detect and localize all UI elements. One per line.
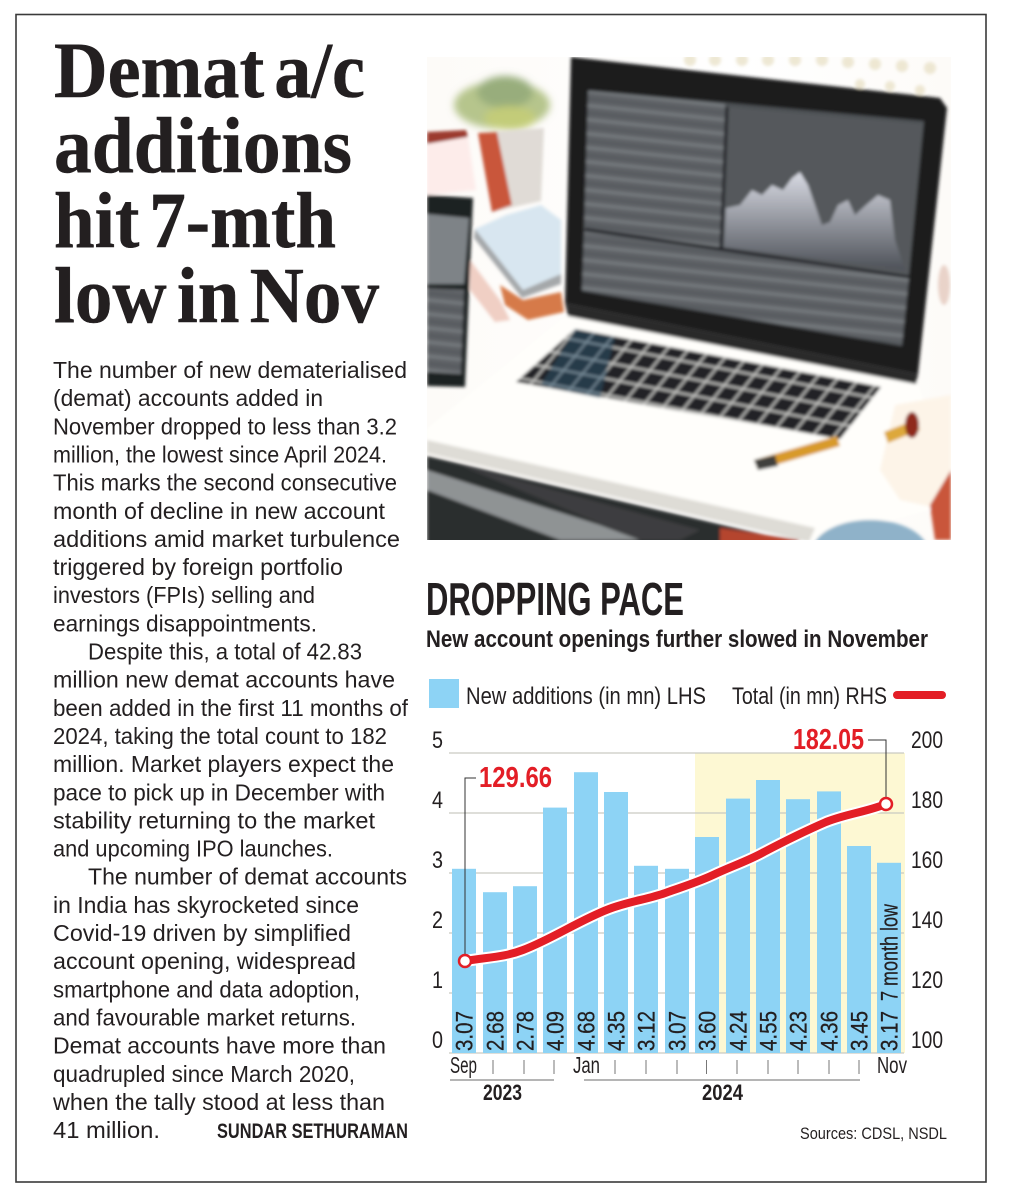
leader line: start: [465, 778, 476, 955]
article body text: 2024, taking the total count to 182: [53, 723, 387, 749]
bar value labels: 3.17: [876, 1011, 904, 1051]
right axis labels: 100: [911, 1027, 943, 1054]
left axis labels: [432, 727, 443, 1054]
right axis labels: 140: [911, 907, 943, 934]
article body text: Demat accounts have more than: [53, 1033, 386, 1059]
article body text: 41 million.: [53, 1117, 160, 1143]
bar value labels: 4.35: [604, 1011, 630, 1051]
article body text: investors (FPIs) selling and: [53, 582, 315, 608]
icon: dotted wall: [684, 54, 936, 95]
article body text: million new demat accounts have: [53, 667, 395, 693]
bars: [452, 772, 901, 1053]
icon: bottom table panel: [582, 232, 909, 345]
right axis labels: 180: [911, 787, 943, 814]
icon: desk bottom: [427, 454, 798, 540]
chart title: DROPPING PACE: [426, 573, 684, 625]
icon: laptop base: [515, 312, 934, 540]
article body text: month of decline in new account: [53, 498, 386, 524]
article body text: This marks the second consecutive: [53, 470, 397, 496]
bar value labels: 4.24: [726, 1011, 752, 1051]
month labels: Nov: [877, 1052, 907, 1078]
icon: left table panel: [584, 91, 725, 247]
icon: background pink object: [938, 265, 950, 305]
end marker: [880, 798, 892, 810]
left axis labels: 4: [432, 787, 443, 814]
article body text: and upcoming IPO launches.: [53, 836, 333, 862]
month labels: Jan: [573, 1052, 600, 1078]
month ticks: [493, 1060, 859, 1074]
left axis labels: 5: [432, 727, 443, 754]
bar value labels: 3.07: [664, 1011, 692, 1051]
icon: spiral pink desk: [470, 260, 510, 322]
gridlines: [449, 753, 904, 1053]
value label: 129.66: 129.66: [479, 762, 552, 794]
total line: [465, 804, 886, 961]
month labels: Sep: [450, 1052, 477, 1078]
headline: [54, 28, 379, 340]
article body text: earnings disappointments.: [53, 610, 317, 636]
year label: 2023: 2023: [483, 1080, 522, 1105]
bar value labels: 4.55: [756, 1011, 782, 1051]
icon: smartphone: [427, 195, 473, 387]
icon: blue sleeve: [814, 518, 926, 540]
right axis labels: 200: [911, 727, 943, 754]
article body text: The number of demat accounts: [88, 864, 407, 890]
headline: Demat a/c: [54, 28, 365, 115]
chart subtitle: New account openings further slowed in November: [426, 626, 928, 653]
bar value labels: 3.07: [452, 1011, 478, 1051]
right axis labels: 120: [911, 967, 943, 994]
year bracket lines: [450, 1079, 860, 1081]
legend: total label: Total (in mn) RHS: [732, 683, 887, 710]
left axis labels: 1: [432, 967, 443, 994]
left axis labels: 0: [432, 1027, 443, 1054]
icon: laptop screen: [582, 90, 924, 346]
icon: plant pot: [494, 127, 545, 210]
article body text: stability returning to the market: [53, 807, 376, 833]
leader line: end: [868, 740, 886, 798]
bar value labels: 3.12: [634, 1011, 660, 1051]
headline: additions: [54, 103, 352, 190]
source note: Sources: CDSL, NSDL: [800, 1125, 947, 1143]
bar value labels: 2.78: [512, 1011, 540, 1051]
article body text: triggered by foreign portfolio: [53, 554, 343, 580]
icon: stacked notebook: [475, 205, 561, 290]
bar value labels: 4.68: [574, 1011, 600, 1051]
bar value labels: 3.45: [846, 1011, 874, 1051]
bar value labels: 4.36: [816, 1011, 844, 1051]
bar value labels: 4.23: [786, 1011, 812, 1051]
icon: red book corner: [427, 130, 468, 144]
chart: new additions bars and total line: [432, 724, 943, 1105]
article body text: smartphone and data adoption,: [53, 976, 360, 1002]
value label: 182.05: 182.05: [793, 724, 864, 756]
article body text: account opening, widespread: [53, 948, 356, 974]
byline: SUNDAR SETHURAMAN: [217, 1120, 408, 1143]
article body text: and favourable market returns.: [53, 1004, 356, 1030]
month labels: [450, 1052, 907, 1078]
article body text: additions amid market turbulence: [53, 526, 400, 552]
icon: pink desk area: [427, 137, 476, 195]
article body text: been added in the first 11 months of: [53, 695, 409, 721]
icon: screen dividers: [585, 107, 909, 277]
article body text: Despite this, a total of 42.83: [88, 638, 362, 664]
bar value labels: [452, 1011, 904, 1051]
right axis labels: [911, 727, 943, 1054]
bar value labels: 3.60: [694, 1011, 722, 1051]
total line halo: [465, 804, 886, 961]
icon: keyboard: [516, 329, 881, 439]
icon: hinge: [565, 303, 918, 384]
headline: hit 7-mth: [54, 178, 336, 265]
legend: [429, 679, 942, 710]
icon: orange notebook edge: [500, 285, 564, 320]
year label: 2024: 2024: [702, 1080, 744, 1105]
article body text: [52, 357, 409, 1143]
bar value labels: 2.68: [482, 1011, 510, 1051]
annotation: 7 month low: 7 month low: [876, 904, 904, 1001]
icon: area price chart: [724, 172, 905, 270]
article body text: (demat) accounts added in: [53, 385, 323, 411]
highlighted 2024 region: [695, 753, 905, 1053]
photo: laptop with trading charts: [427, 54, 951, 584]
article body text: pace to pick up in December with: [53, 779, 385, 805]
article body text: million. Market players expect the: [53, 751, 394, 777]
article body text: November dropped to less than 3.2: [53, 413, 397, 439]
bar value labels: 4.09: [542, 1011, 570, 1051]
article body text: The number of new dematerialised: [53, 357, 407, 383]
article body text: million, the lowest since April 2024.: [53, 442, 387, 468]
icon: plant leaves: [454, 76, 550, 130]
left axis labels: 3: [432, 847, 443, 874]
article body text: quadrupled since March 2020,: [53, 1061, 355, 1087]
icon: pencil: [754, 436, 840, 470]
right axis labels: 160: [911, 847, 943, 874]
start marker: [459, 955, 471, 967]
legend: total line sample: [897, 691, 942, 699]
article body text: when the tally stood at less than: [52, 1089, 385, 1115]
icon: right chart panel: [908, 256, 910, 272]
headline: low in Nov: [54, 253, 379, 340]
left axis labels: 2: [432, 907, 443, 934]
legend: new additions label: New additions (in mn) LHS: [466, 683, 706, 710]
article body text: Covid-19 driven by simplified: [53, 920, 351, 946]
legend: new additions swatch: [429, 679, 459, 708]
icon: hand with pen: [880, 395, 951, 508]
article body text: in India has skyrocketed since: [53, 892, 359, 918]
icon: laptop lid: [565, 57, 947, 374]
